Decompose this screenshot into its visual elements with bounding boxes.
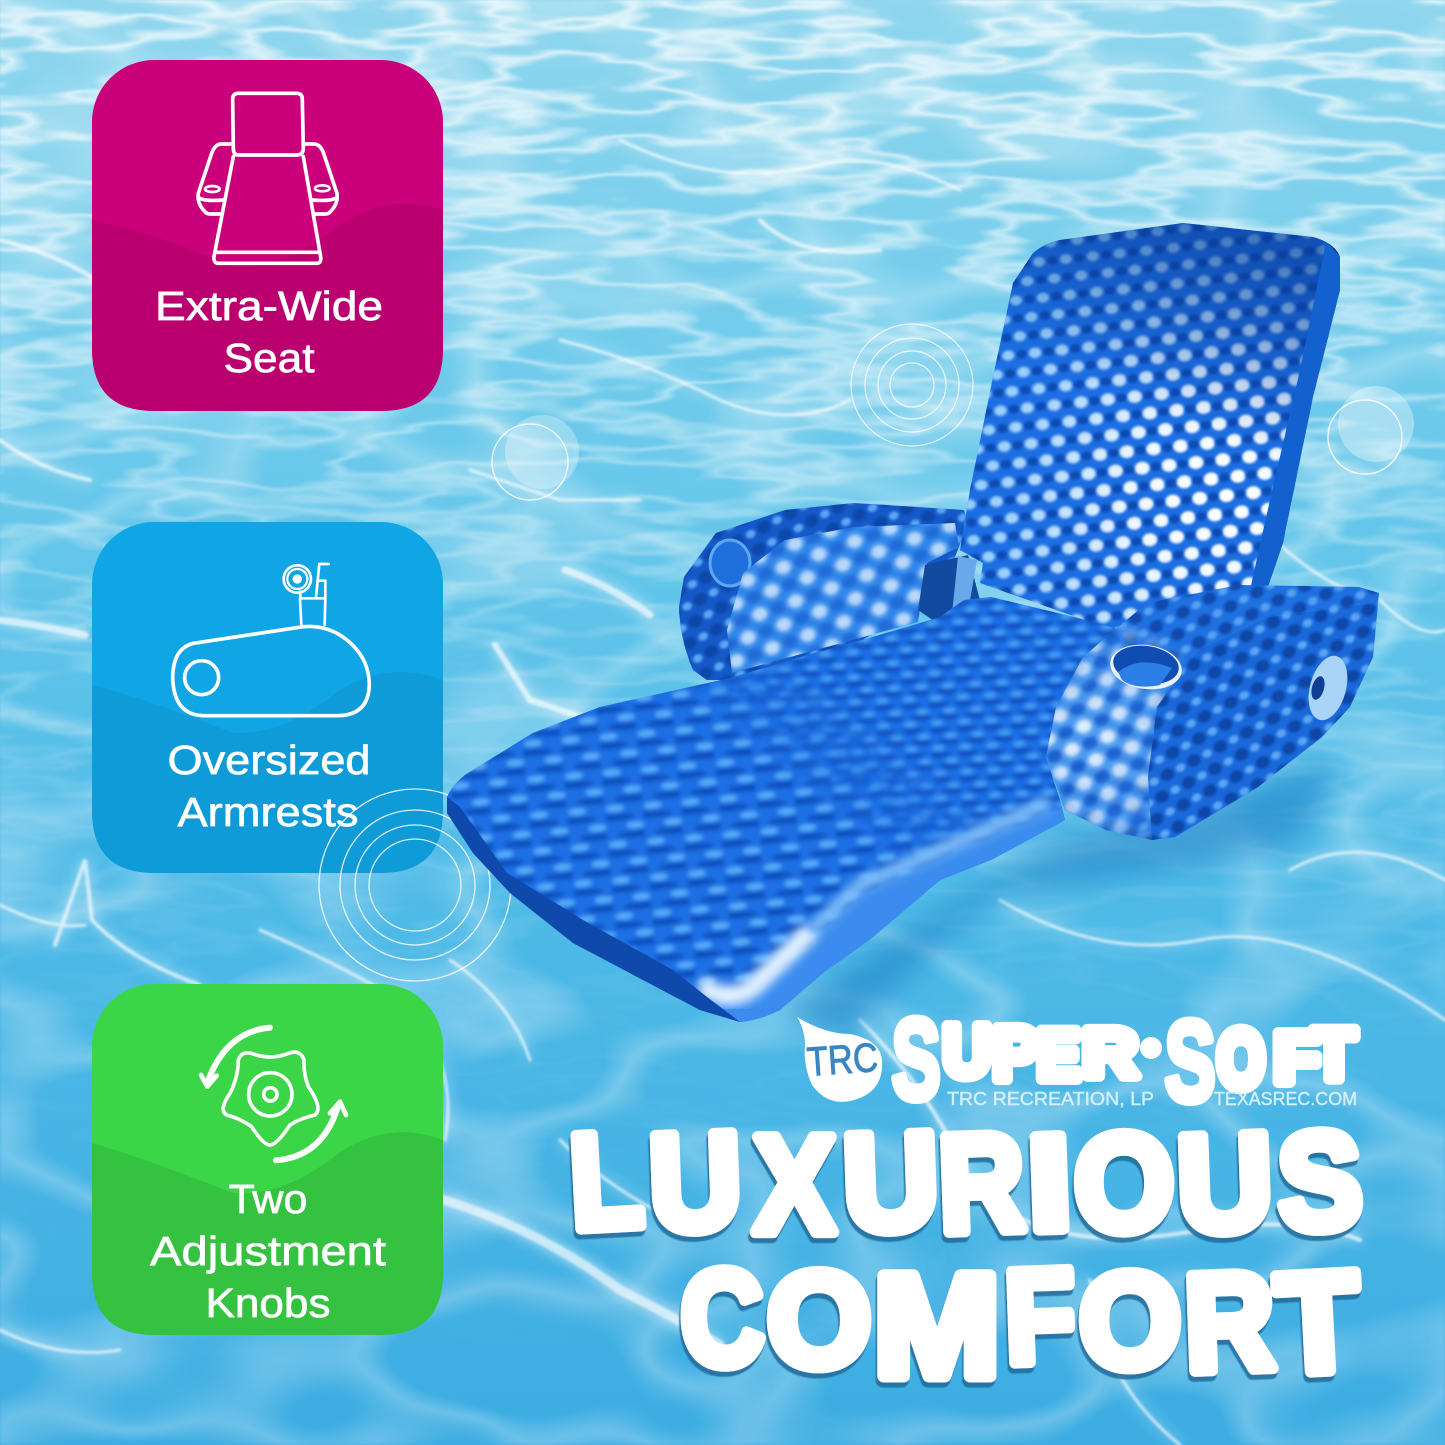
tagline: TRC Recreation, LP: TRC RECREATION, LP — [947, 1088, 1154, 1109]
icon: knob with rotation arrows — [201, 1028, 346, 1160]
bubble: left — [492, 415, 579, 500]
wordmark: SUPER·SOFT: F — [1274, 1018, 1320, 1098]
label: Oversized Armrests: Oversized — [168, 737, 370, 783]
headline: Luxurious Comfort: C — [678, 1242, 766, 1395]
headline: Luxurious Comfort: U — [647, 1104, 744, 1261]
seat pad lit rim — [707, 805, 1070, 1027]
wordmark: SUPER·SOFT: E — [1037, 1017, 1080, 1095]
icon: seat lounger — [198, 93, 337, 263]
label: Extra-Wide Seat: Extra-Wide — [155, 283, 383, 329]
icon: TRC drop — [797, 1017, 882, 1102]
headline: Luxurious Comfort: U — [841, 1103, 941, 1261]
headline: Luxurious Comfort: O — [1073, 1105, 1175, 1261]
wordmark: SUPER·SOFT — [892, 997, 1356, 1126]
near armrest: front and top — [1046, 585, 1379, 840]
backrest — [950, 215, 1350, 635]
product: reclining pool lounger — [440, 215, 1385, 1030]
panel: oversized armrests — [92, 522, 443, 873]
label: Extra-Wide Seat — [155, 283, 383, 381]
label: Two Adjustment Knobs: Knobs — [206, 1280, 330, 1326]
label: Oversized Armrests — [168, 737, 370, 835]
wordmark: SUPER·SOFT: P — [993, 1013, 1039, 1096]
headline: Luxurious Comfort — [566, 1103, 1365, 1407]
label: Two Adjustment Knobs: Adjustment — [150, 1228, 387, 1274]
cup holder — [1107, 640, 1185, 694]
near armrest: side — [1148, 593, 1379, 840]
headline: Luxurious Comfort: L — [566, 1103, 647, 1258]
wordmark: SUPER·SOFT: R — [1083, 1016, 1138, 1091]
bubble: right — [1328, 386, 1414, 474]
headline: Luxurious Comfort: F — [1002, 1242, 1078, 1392]
wordmark: SUPER·SOFT: O — [1217, 1015, 1265, 1104]
tagline: texasrec.com: TEXASREC.COM — [1214, 1088, 1357, 1109]
label: Extra-Wide Seat: Seat — [224, 335, 315, 381]
lounger shadow in water — [780, 760, 1340, 1035]
logo: TRC Super-Soft — [797, 997, 1357, 1126]
label: Oversized Armrests: Armrests — [178, 789, 358, 835]
panel: extra-wide seat — [92, 60, 443, 411]
label: Two Adjustment Knobs — [150, 1176, 387, 1326]
seat pad dark side edge — [447, 797, 740, 1022]
icon: armrest with drink — [173, 564, 369, 716]
seat pad — [447, 597, 1116, 1022]
headline: Luxurious Comfort: X — [754, 1107, 835, 1262]
wordmark: SUPER·SOFT: S — [1165, 997, 1216, 1126]
wordmark: SUPER·SOFT: T — [1312, 1016, 1356, 1095]
headline: Luxurious Comfort: O — [766, 1244, 872, 1396]
label: Two Adjustment Knobs: Two — [228, 1176, 308, 1222]
ripple rings: lower — [319, 789, 511, 981]
armrest handle hole — [1302, 651, 1354, 725]
hinge mechanism — [918, 555, 980, 625]
headline: Luxurious Comfort: O — [1078, 1245, 1182, 1397]
headline: Luxurious Comfort: R — [936, 1106, 1027, 1262]
panel: two adjustment knobs — [92, 984, 443, 1335]
far armrest inner face — [727, 523, 959, 673]
headline: Luxurious Comfort: S — [1275, 1103, 1365, 1259]
wordmark: SUPER·SOFT: S — [892, 997, 941, 1124]
far armrest — [679, 503, 966, 680]
headline: Luxurious Comfort: U — [1175, 1104, 1275, 1262]
headline: Luxurious Comfort: R — [1182, 1243, 1277, 1400]
icon: TRC drop: TRC — [805, 1034, 879, 1085]
wordmark: SUPER·SOFT: U — [943, 1010, 991, 1092]
ripple rings: upper — [851, 324, 973, 446]
headline: Luxurious Comfort: T — [1273, 1242, 1363, 1404]
headline: Luxurious Comfort: M — [874, 1245, 1000, 1407]
headline: Luxurious Comfort: I — [1025, 1107, 1074, 1259]
